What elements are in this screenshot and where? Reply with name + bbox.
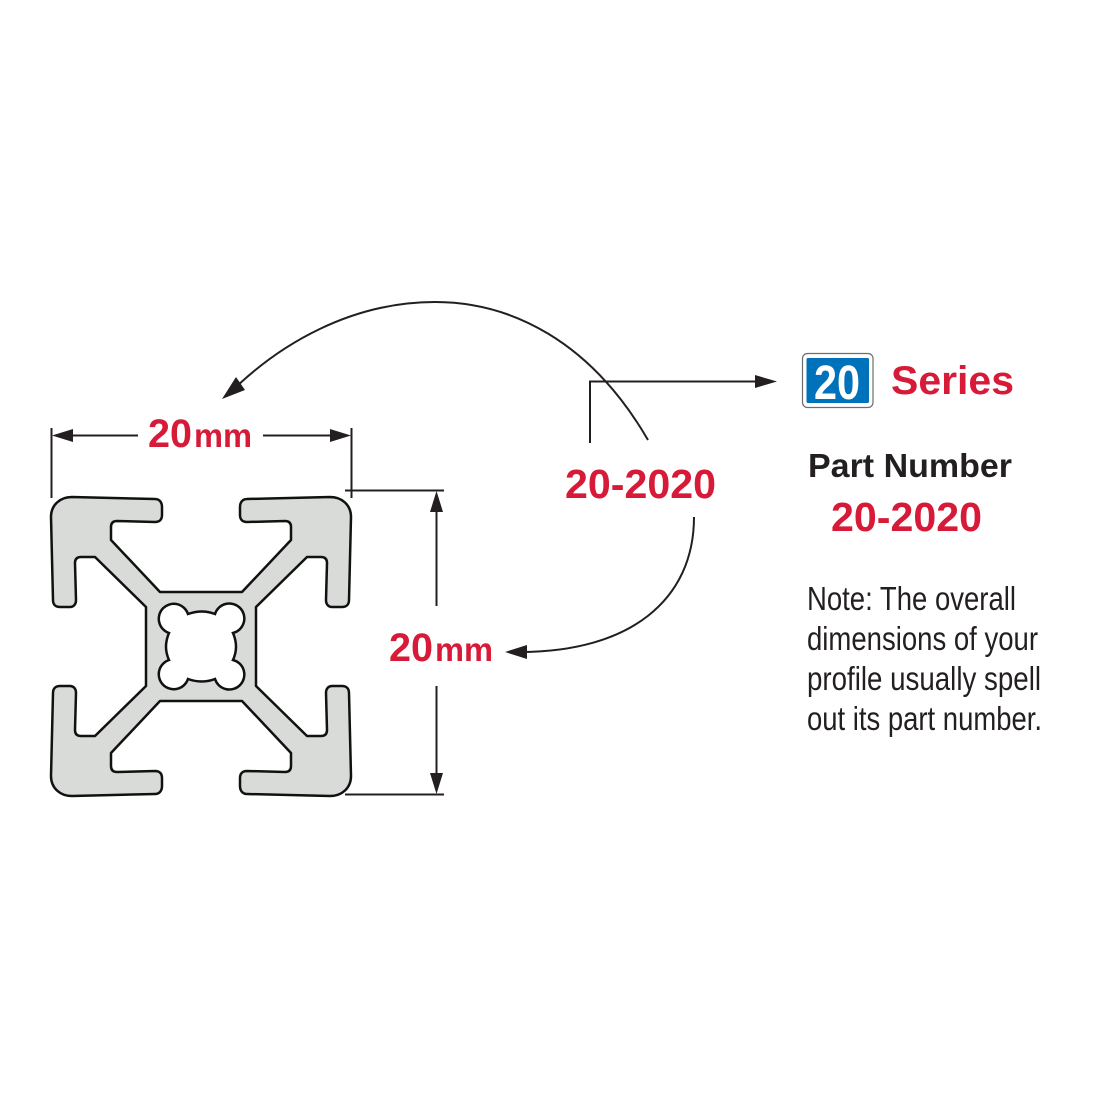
aluminium extrusion profile cross-section xyxy=(51,497,351,796)
width dimension: 20mm: mm xyxy=(194,417,252,454)
part number value: 20-2020 xyxy=(831,494,982,540)
series badge icon: 20: 20 xyxy=(814,357,860,410)
elbow arrow to series badge xyxy=(590,375,777,443)
curved arrow to width dimension xyxy=(222,302,648,440)
heading: Series: Series xyxy=(891,359,1014,403)
height dimension: 20mm xyxy=(345,490,493,794)
heading: Part Number: Part Number xyxy=(808,447,1012,484)
explanatory note: Note: The overall xyxy=(807,580,1016,617)
explanatory note: dimensions of your xyxy=(807,620,1038,657)
curved arrow to height dimension xyxy=(505,517,694,659)
explanatory note: out its part number. xyxy=(807,700,1042,737)
part number callout: 20-2020: 20-2020 xyxy=(565,461,716,507)
centre bore of the profile xyxy=(159,603,244,690)
height dimension: 20mm: 20 xyxy=(389,626,433,670)
height dimension: 20mm: mm xyxy=(435,631,493,668)
explanatory note xyxy=(807,580,1042,737)
width dimension: 20mm xyxy=(52,412,352,498)
width dimension: 20mm: 20 xyxy=(148,412,192,456)
explanatory note: profile usually spell xyxy=(807,660,1041,697)
